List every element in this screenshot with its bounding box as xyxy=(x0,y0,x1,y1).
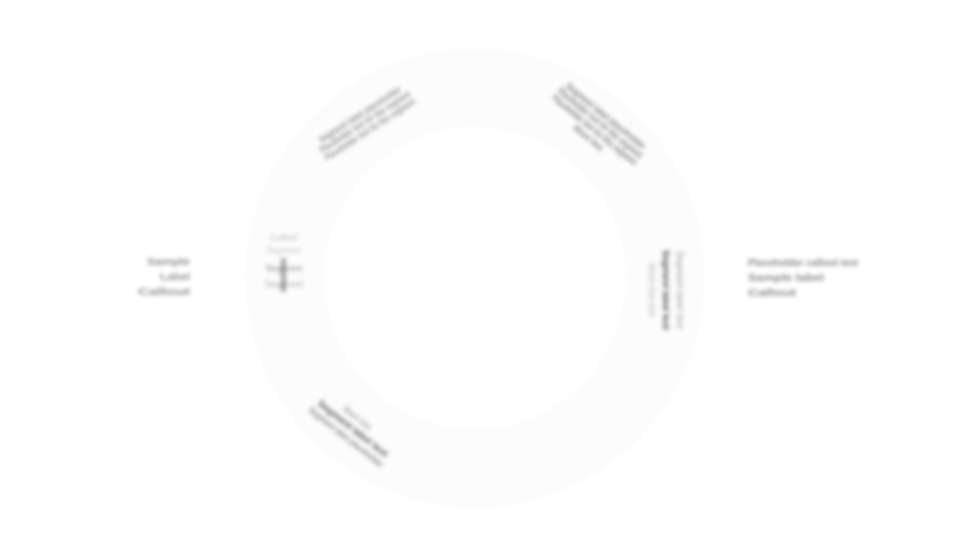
right callout: Placeholder callout text xyxy=(748,258,859,269)
segment label: top left xyxy=(313,81,417,163)
segment label: bottom left: Short line xyxy=(341,404,374,433)
segment label: left: Segment xyxy=(265,280,303,289)
left callout: Label xyxy=(160,272,190,283)
left callout: Callout xyxy=(138,287,191,298)
segment label: top right: Placeholder text for this segment xyxy=(556,86,644,160)
left callout xyxy=(138,257,191,298)
ring xyxy=(248,51,702,505)
right callout: Callout xyxy=(748,288,797,299)
segment label: bottom left xyxy=(307,388,399,470)
left callout: Sample xyxy=(147,257,191,268)
segment label: top right: Placeholder text for this segment xyxy=(550,93,639,167)
segment label: left: Segment xyxy=(267,246,301,255)
segment label: bottom left: Segment label placeholder xyxy=(307,405,386,470)
segment label: right: Short line text xyxy=(647,263,657,317)
segment label: left xyxy=(265,233,303,292)
segment label: left: Label xyxy=(271,233,297,242)
segment label: right: Segment label text xyxy=(661,250,671,330)
segment label: left: Segment xyxy=(266,264,302,273)
right callout: Sample label xyxy=(748,273,824,284)
segment label: top right xyxy=(544,79,650,175)
segment label: right xyxy=(647,250,685,330)
segment label: right: Segment label text xyxy=(675,251,685,329)
segment label: top left: Placeholder text for this segment xyxy=(323,96,417,163)
segment label: top right: Segment label placeholder xyxy=(564,81,648,152)
segment label: bottom left: Segment label text xyxy=(316,398,390,459)
segment label: top right: Short line xyxy=(571,123,605,153)
segment label: top left: Segment label placeholder xyxy=(317,84,403,145)
segment label: top left: Placeholder text for this segment xyxy=(318,89,412,155)
right callout xyxy=(748,258,859,299)
